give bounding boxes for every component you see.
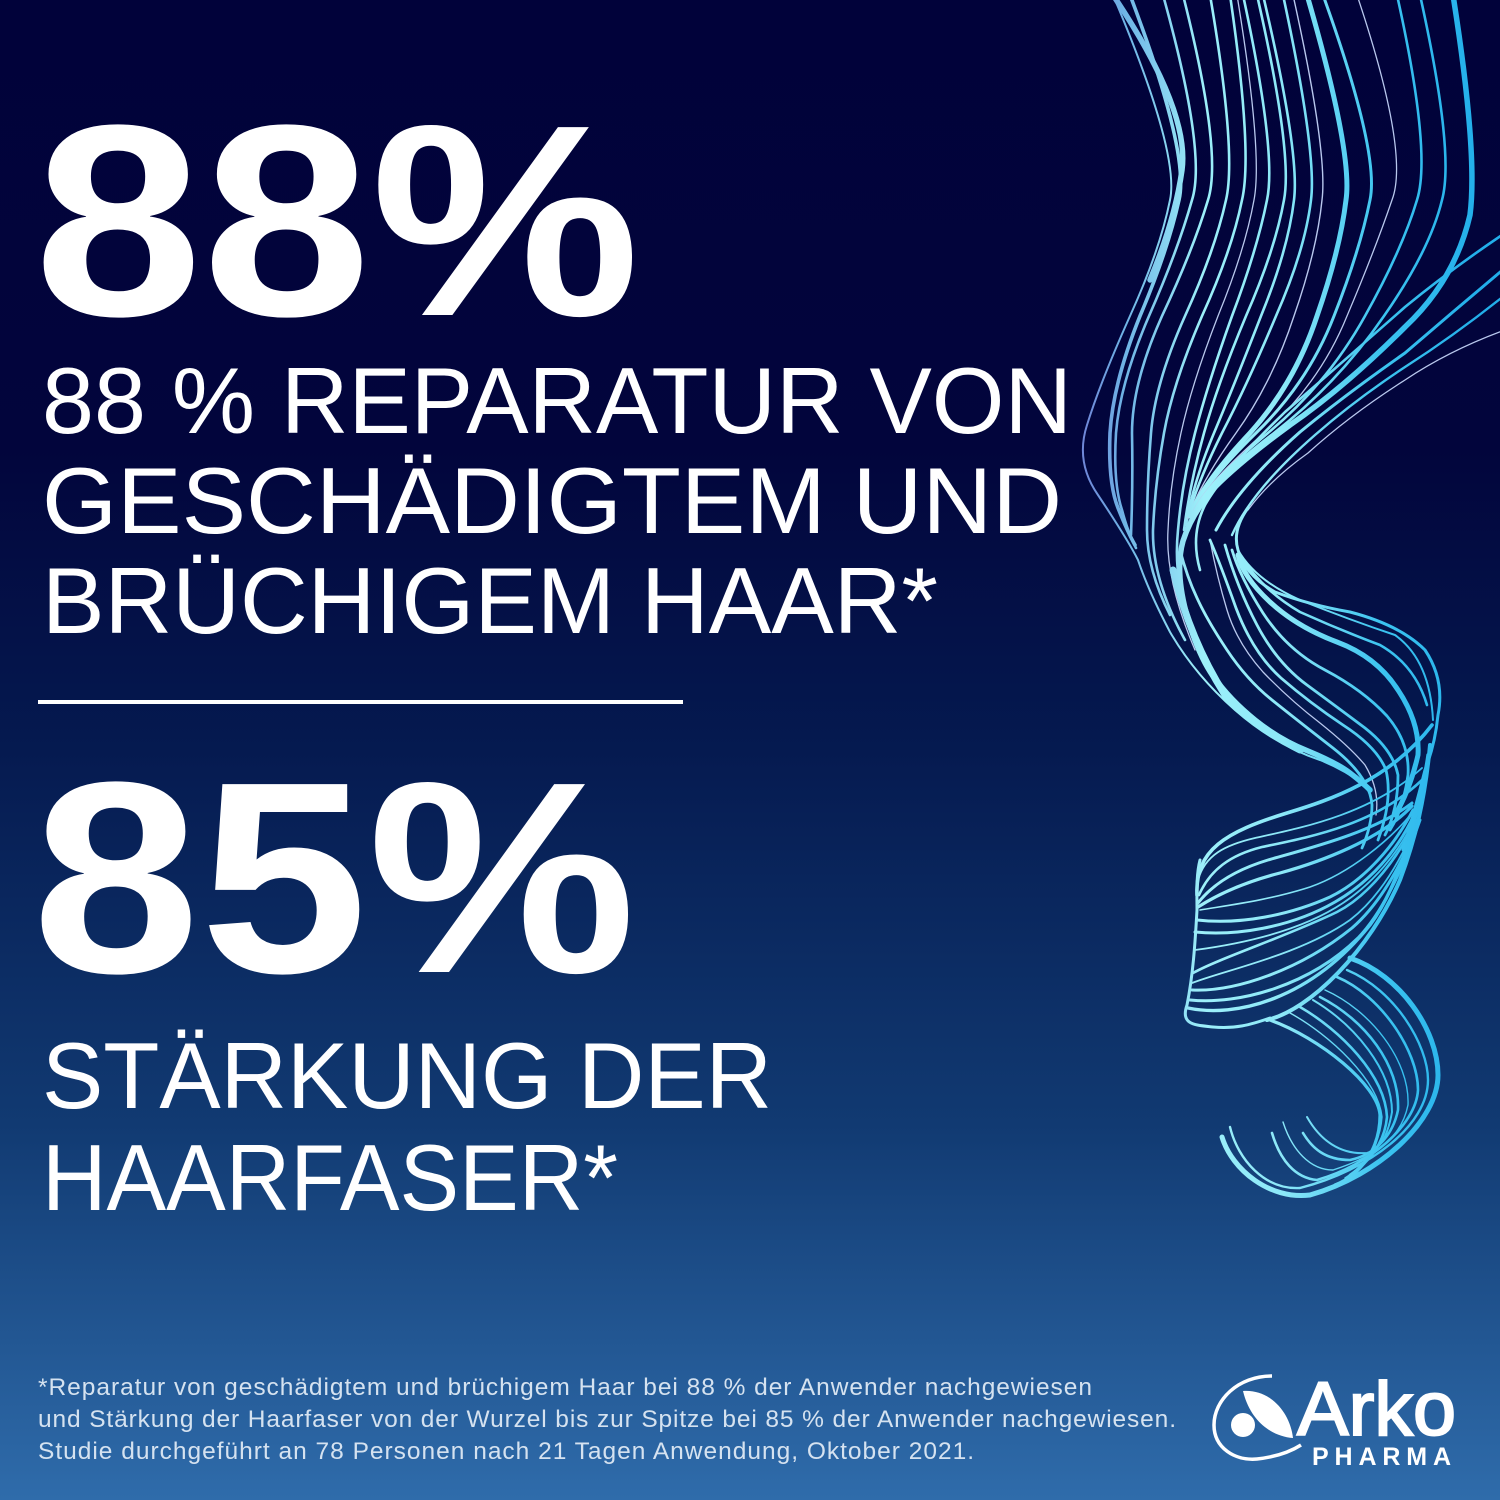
text block: 85 % claim: STÄRKUNG DER: [42, 1023, 772, 1128]
hair: lower curl: [1222, 958, 1438, 1196]
footnote: und Stärkung der Haarfaser von der Wurzel bis zur Spitze bei 85 % der Anwender nachgewiesen.: [38, 1406, 1176, 1433]
logo wordmark: Arko: [1297, 1367, 1456, 1452]
text block: 85 % claim: HAARFASER*: [42, 1125, 618, 1230]
hair illustration: [1083, 0, 1500, 1196]
footnote: *Reparatur von geschädigtem und brüchigem Haar bei 88 % der Anwender nachgewiesen: [38, 1374, 1092, 1401]
text block: 88 % claim: [42, 348, 1072, 653]
hair: middle fold: [1185, 725, 1432, 1028]
divider: [38, 700, 683, 704]
hair: upper strands: [1083, 0, 1500, 850]
logo subline: PHARMA: [1312, 1443, 1451, 1471]
text block: 88 % claim: GESCHÄDIGTEM UND: [42, 448, 1062, 553]
footnote: [38, 1374, 1176, 1465]
logo icon: [1214, 1376, 1301, 1459]
logo: Arko Pharma: [1214, 1367, 1456, 1471]
text block: 85 % claim: [42, 1023, 772, 1230]
text block: 88 % claim: 88 % REPARATUR VON: [42, 348, 1072, 453]
stat: 88%: 88%: [34, 68, 640, 373]
stat: 85%: 85%: [32, 725, 636, 1030]
text block: 88 % claim: BRÜCHIGEM HAAR*: [42, 548, 938, 653]
footnote: Studie durchgeführt an 78 Personen nach 21 Tagen Anwendung, Oktober 2021.: [38, 1438, 974, 1465]
